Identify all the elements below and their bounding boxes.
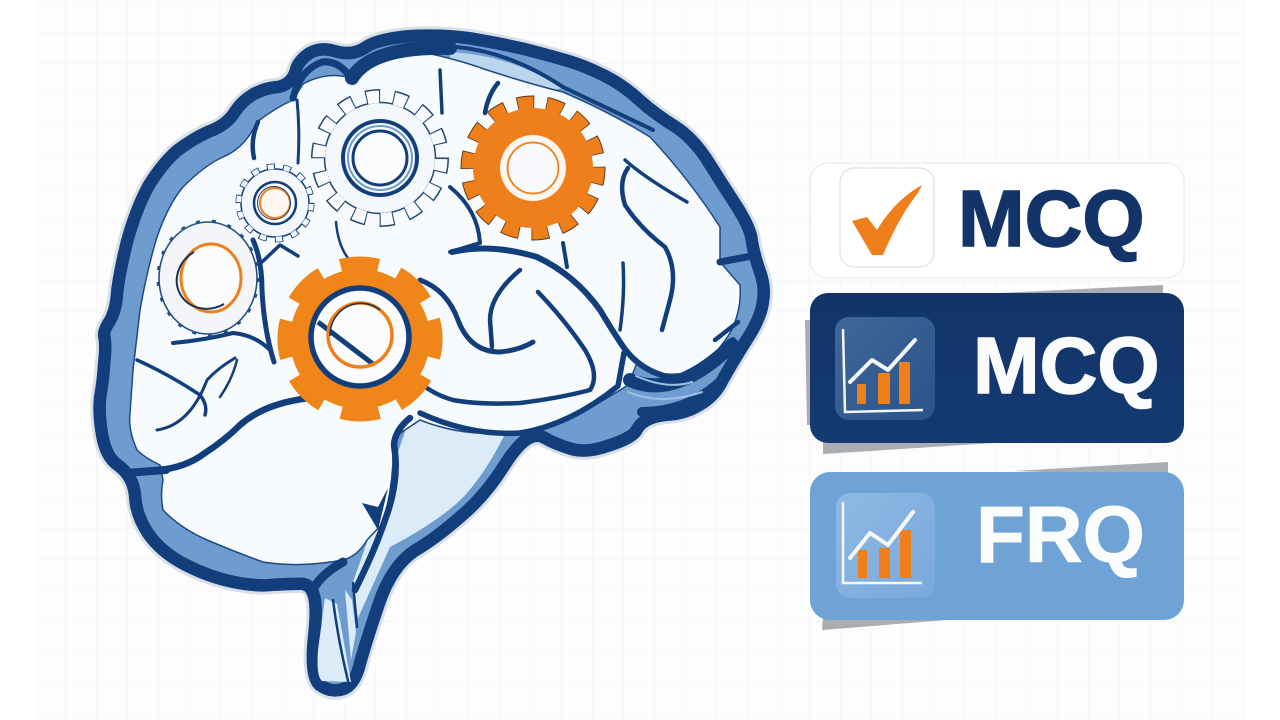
stem spike: [362, 488, 388, 530]
sulci and fold lines: [126, 47, 752, 685]
pale band highlight: [450, 52, 563, 95]
card shadow: [805, 285, 1163, 454]
brain silhouette and outline: [93, 29, 770, 697]
icon: bar and line chart: [836, 493, 935, 598]
label: MCQ: MCQ: [958, 174, 1145, 263]
label: MCQ: MCQ: [973, 321, 1160, 410]
card: MCQ white: [810, 163, 1184, 278]
label: FRQ: FRQ: [976, 490, 1145, 579]
icon: orange check mark: [840, 168, 934, 267]
gear: orange top: [468, 102, 598, 234]
gear: pale left: [158, 221, 258, 335]
icon: bar and line chart: [835, 317, 935, 420]
card shadow: [822, 462, 1168, 630]
fold highlights lower right: [628, 376, 702, 399]
gear: orange bottom: [271, 250, 449, 428]
gear: white outlined large: [318, 96, 442, 220]
brain stem fill: [318, 417, 504, 682]
illustration: brain: [93, 29, 770, 697]
cerebrum white body: [130, 52, 740, 565]
card: FRQ blue: [810, 462, 1184, 630]
gear: small blue and orange: [239, 167, 311, 239]
card: MCQ navy: [805, 285, 1184, 454]
